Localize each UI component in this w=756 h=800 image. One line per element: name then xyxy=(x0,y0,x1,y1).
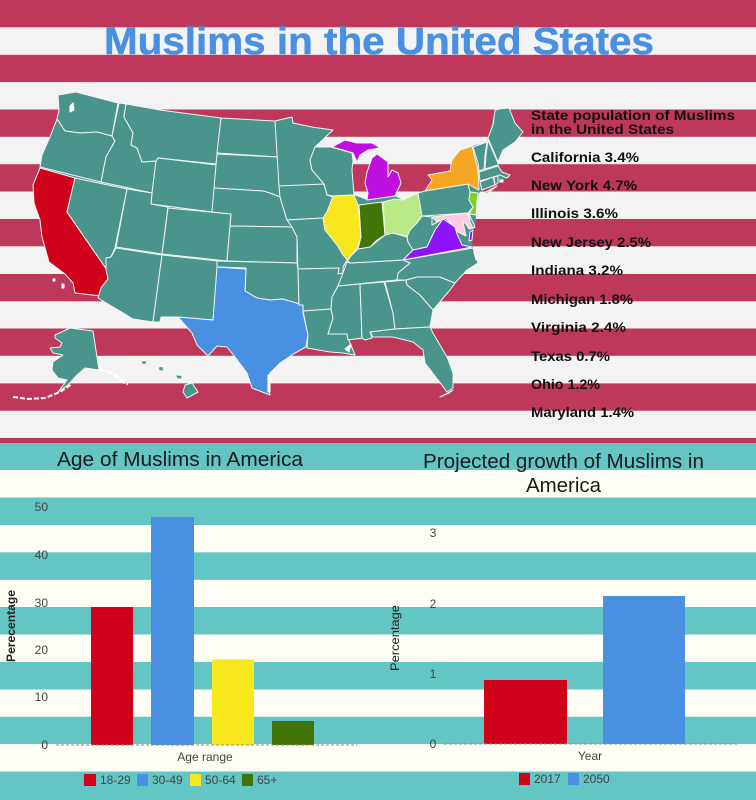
y axis title: Percentage xyxy=(388,605,402,671)
state: New York xyxy=(425,146,497,195)
y axis labels: 0 xyxy=(41,738,48,752)
y axis labels xyxy=(35,500,48,752)
legend: 18-29 xyxy=(100,773,131,787)
chart: projected growth of Muslims in America xyxy=(388,451,738,786)
y axis labels: 0 xyxy=(430,737,437,751)
bar: 18-29 xyxy=(91,607,133,745)
title: Muslims in the United States xyxy=(104,21,654,63)
list heading: State population of Muslims xyxy=(531,107,735,123)
bar: 2017 xyxy=(484,680,567,744)
baseline xyxy=(56,744,357,746)
bar: 65+ xyxy=(272,721,314,745)
legend: 50-64 xyxy=(205,773,236,787)
state: Indiana xyxy=(358,202,385,249)
list heading: in the United States xyxy=(531,121,674,137)
state: New Jersey xyxy=(469,192,478,215)
bar: 50-64 xyxy=(212,660,254,745)
bar: 30-49 xyxy=(151,517,194,745)
y axis labels: 2 xyxy=(430,597,437,611)
legend: 2017 xyxy=(534,772,561,786)
background: teal and cream stripes xyxy=(0,443,756,800)
list item: Michigan: Michigan 1.8% xyxy=(531,291,634,307)
list item: Illinois: Illinois 3.6% xyxy=(531,205,619,221)
y axis title: Perecentage xyxy=(4,590,18,662)
chart title: America xyxy=(526,475,602,497)
legend: 65+ xyxy=(257,773,277,787)
list item: New Jersey: New Jersey 2.5% xyxy=(531,234,652,250)
state: Maryland xyxy=(432,213,473,236)
list item: Virginia: Virginia 2.4% xyxy=(531,319,627,335)
state population list xyxy=(531,107,735,420)
list item: California: California 3.4% xyxy=(531,149,640,165)
state: Michigan xyxy=(332,140,401,200)
legend xyxy=(519,772,610,786)
list item: Maryland: Maryland 1.4% xyxy=(531,404,635,420)
y axis labels: 3 xyxy=(430,526,437,540)
y axis labels: 10 xyxy=(35,690,48,704)
chart: age of Muslims in America xyxy=(4,449,357,787)
y axis labels: 30 xyxy=(35,596,48,610)
state: Hawaii xyxy=(183,383,198,398)
legend: 30-49 xyxy=(152,773,183,787)
Hawaii small islands xyxy=(142,361,182,379)
x axis title: Year xyxy=(578,749,602,763)
chart title: Projected growth of Muslims in xyxy=(423,451,704,473)
coastal islands and inlets xyxy=(53,103,503,397)
baseline xyxy=(444,743,738,745)
list item: Texas: Texas 0.7% xyxy=(531,348,611,364)
x axis title: Age range xyxy=(177,750,233,764)
y axis labels: 40 xyxy=(35,548,48,562)
y axis labels: 20 xyxy=(35,643,48,657)
background: red and white stripes xyxy=(0,0,756,443)
state: Ohio xyxy=(383,193,422,237)
legend: 2050 xyxy=(583,772,610,786)
state: Virginia xyxy=(403,219,473,260)
list item: Indiana: Indiana 3.2% xyxy=(531,262,624,278)
chart title xyxy=(423,451,704,497)
state: Alaska xyxy=(50,328,99,392)
bar: 2050 xyxy=(603,596,685,744)
chart title: Age of Muslims in America xyxy=(57,449,304,471)
Alaska islands xyxy=(13,384,72,399)
y axis labels: 50 xyxy=(35,500,48,514)
state: Texas xyxy=(178,267,308,395)
list heading xyxy=(531,107,735,137)
y axis labels xyxy=(430,526,437,751)
map of the United States xyxy=(13,92,523,399)
legend xyxy=(84,773,277,787)
list item: Ohio: Ohio 1.2% xyxy=(531,376,601,392)
y axis labels: 1 xyxy=(430,667,437,681)
state: California xyxy=(33,168,108,296)
state: Illinois xyxy=(323,195,361,260)
list item: New York: New York 4.7% xyxy=(531,177,638,193)
